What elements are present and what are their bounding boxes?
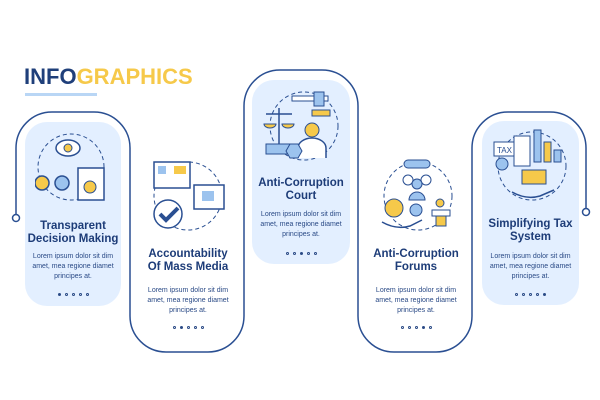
card 1 text: Decision Making: [28, 232, 118, 244]
card 3 text: Anti-Corruption: [258, 177, 344, 189]
card 1 text: Lorem ipsum dolor sit dim: [33, 253, 113, 260]
card 3 text: amet, mea regione diamet: [260, 221, 342, 228]
card 2 text: Of Mass Media: [148, 260, 228, 272]
card 5 text: amet, mea regione diamet: [490, 263, 571, 270]
icon: tax: TAX: [497, 146, 513, 155]
card 4 text: Forums: [395, 260, 437, 272]
card 1 text: principes at.: [54, 273, 92, 280]
card 3 text: [258, 177, 344, 255]
card 1 text: [28, 220, 118, 296]
card 5 text: [488, 218, 573, 296]
icon: mass media: [153, 161, 225, 230]
card 4 text: Anti-Corruption: [373, 248, 459, 260]
card 5 text: principes at.: [512, 273, 549, 280]
card 5 text: Simplifying Tax: [488, 218, 573, 230]
card 4 text: [373, 248, 459, 329]
card 5 text: System: [510, 230, 551, 242]
card 1 text: amet, mea regione diamet: [32, 263, 114, 270]
card 4 text: Lorem ipsum dolor sit dim: [376, 287, 456, 294]
card 3 text: Lorem ipsum dolor sit dim: [261, 211, 341, 218]
card 4 text: amet, mea regione diamet: [375, 297, 457, 304]
card 3 text: Court: [286, 190, 316, 202]
card 3 text: principes at.: [282, 231, 320, 238]
card fills: [25, 122, 121, 306]
card 5 text: Lorem ipsum dolor sit dim: [490, 253, 571, 260]
icon: transparent decision: [35, 134, 105, 201]
icon: forums: [382, 160, 452, 230]
card 2 text: principes at.: [169, 307, 207, 314]
icon: court: [264, 92, 338, 160]
card 2 text: Lorem ipsum dolor sit dim: [148, 287, 228, 294]
card 2 text: Accountability: [148, 248, 228, 260]
title: INFOGRAPHICS: [24, 64, 193, 89]
card 4 text: principes at.: [397, 307, 435, 314]
icon: tax: [494, 130, 566, 200]
card 2 text: [147, 248, 229, 329]
card 2 text: amet, mea regione diamet: [147, 297, 229, 304]
card 1 text: Transparent: [40, 220, 106, 232]
